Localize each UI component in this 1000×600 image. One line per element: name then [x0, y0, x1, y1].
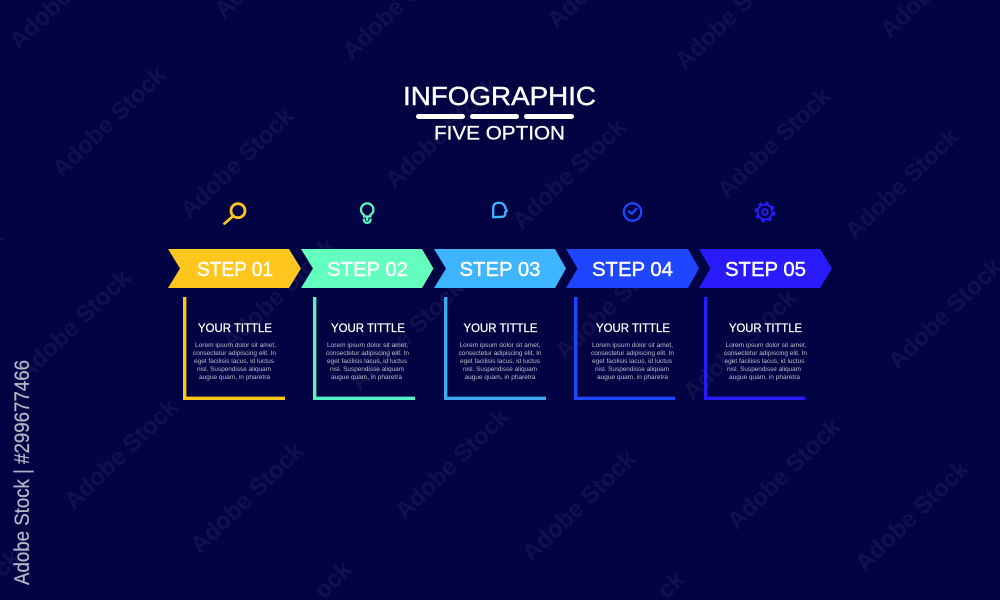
panel: step 3 text: Lorem ipsum dolor sit amet,	[460, 342, 541, 349]
watermark pattern: Adobe Stock	[722, 413, 847, 535]
icon: light bulb	[361, 203, 373, 223]
step 4 column	[566, 203, 699, 400]
icon: magnifier	[224, 204, 245, 224]
watermark pattern: Adobe Stock	[185, 437, 310, 559]
panel: step 5 text: consectetur adipiscing elit. In	[724, 350, 807, 357]
watermark pattern: Adobe Stock	[507, 113, 632, 235]
step 1 column	[168, 204, 301, 400]
arrow: step 03: STEP 03	[460, 259, 540, 281]
panel: step 2 text: augue quam, in pharetra	[331, 374, 402, 381]
arrow: step 04: STEP 04	[592, 259, 673, 281]
panel: step 1 text: nisl. Suspendisse aliquam	[197, 366, 271, 373]
watermark pattern: Adobe Stock	[840, 123, 965, 245]
arrow: step 03	[434, 249, 566, 288]
panel: step 1 text: consectetur adipiscing elit. In	[193, 350, 276, 357]
panel: step 1 text: eget facilisis lacus, id luctus	[194, 358, 274, 365]
panel: step 5 text: augue quam, in pharetra	[729, 374, 800, 381]
watermark pattern: Adobe Stock	[12, 264, 137, 386]
panel: step 4 text	[574, 297, 675, 400]
panel: step 2 text: Lorem ipsum dolor sit amet,	[327, 342, 408, 349]
panel: step 3 text: augue quam, in pharetra	[464, 374, 536, 381]
icon: clock check	[624, 203, 641, 221]
panel: step 4 text: Lorem ipsum dolor sit amet,	[592, 342, 673, 349]
watermark pattern: Adobe Stock	[517, 445, 642, 567]
subtitle: FIVE OPTION	[434, 122, 565, 144]
watermark pattern: Adobe Stock	[390, 403, 515, 525]
arrow: step 05: STEP 05	[725, 259, 806, 281]
watermark pattern: Adobe Stock	[550, 243, 675, 365]
panel: step 2 text: nisl. Suspendisse aliquam	[330, 366, 404, 373]
panel: step 4 text: YOUR TITTLE	[596, 323, 670, 335]
watermark pattern: Adobe Stock	[380, 72, 505, 194]
panel: step 2 text	[313, 297, 415, 400]
watermark pattern: Adobe Stock	[217, 233, 342, 355]
panel: step 4 text: consectetur adipiscing elit. In	[591, 350, 674, 357]
panel: step 5 text: eget facilisis lacus, id luctus	[724, 358, 804, 365]
panel: step 3 text: YOUR TITTLE	[464, 323, 538, 335]
step 3 column	[434, 203, 566, 400]
panel: step 5 text: nisl. Suspendisse aliquam	[727, 366, 801, 373]
watermark pattern: Adobe Stock	[345, 274, 470, 396]
step 5 column	[699, 203, 832, 400]
watermark pattern: Adobe Stock	[175, 102, 300, 224]
panel: step 3 text: eget facilisis lacus, id luctus	[460, 358, 540, 365]
arrow: step 02: STEP 02	[327, 259, 408, 281]
panel: step 4 text: augue quam, in pharetra	[597, 374, 668, 381]
arrow: step 05	[699, 249, 832, 288]
arrow: step 01	[168, 249, 301, 288]
watermark pattern: Adobe Stock	[850, 455, 975, 577]
panel: step 4 text: eget facilisis lacus, id luctus	[592, 358, 672, 365]
panel: step 5 text: Lorem ipsum dolor sit amet,	[726, 342, 807, 349]
watermark pattern: Adobe Stock	[712, 82, 837, 204]
icon: gear	[756, 203, 774, 221]
panel: step 5 text: YOUR TITTLE	[729, 323, 802, 335]
title: INFOGRAPHIC	[403, 83, 596, 111]
panel: step 4 text: nisl. Suspendisse aliquam	[595, 366, 669, 373]
icon: head profile	[493, 203, 507, 217]
panel: step 3 text	[444, 297, 546, 400]
panel: step 2 text: eget facilisis lacus, id luctus	[327, 358, 407, 365]
step 2 column	[301, 203, 434, 400]
panel: step 1 text: YOUR TITTLE	[198, 323, 272, 335]
panel: step 2 text: consectetur adipiscing elit. In	[326, 350, 409, 357]
arrow: step 04	[566, 249, 699, 288]
panel: step 3 text: nisl. Suspendisse aliquam	[463, 366, 537, 373]
watermark pattern: Adobe Stock	[678, 284, 803, 406]
arrow: step 02	[301, 249, 434, 288]
panel: step 5 text	[704, 297, 807, 400]
panel: step 1 text	[183, 297, 285, 400]
title underline bars	[416, 114, 574, 119]
panel: step 1 text: Lorem ipsum dolor sit amet,	[195, 342, 276, 349]
watermark pattern: Adobe Stock	[47, 61, 172, 183]
panel: step 1 text: augue quam, in pharetra	[199, 374, 270, 381]
panel: step 2 text: YOUR TITTLE	[331, 323, 405, 335]
title block	[403, 83, 596, 144]
side stock id text: Adobe Stock | #299677466	[11, 360, 34, 585]
arrow: step 01: STEP 01	[197, 259, 273, 281]
panel: step 3 text: consectetur adipiscing elit. In	[458, 350, 542, 357]
watermark pattern: Adobe Stock	[59, 393, 184, 515]
